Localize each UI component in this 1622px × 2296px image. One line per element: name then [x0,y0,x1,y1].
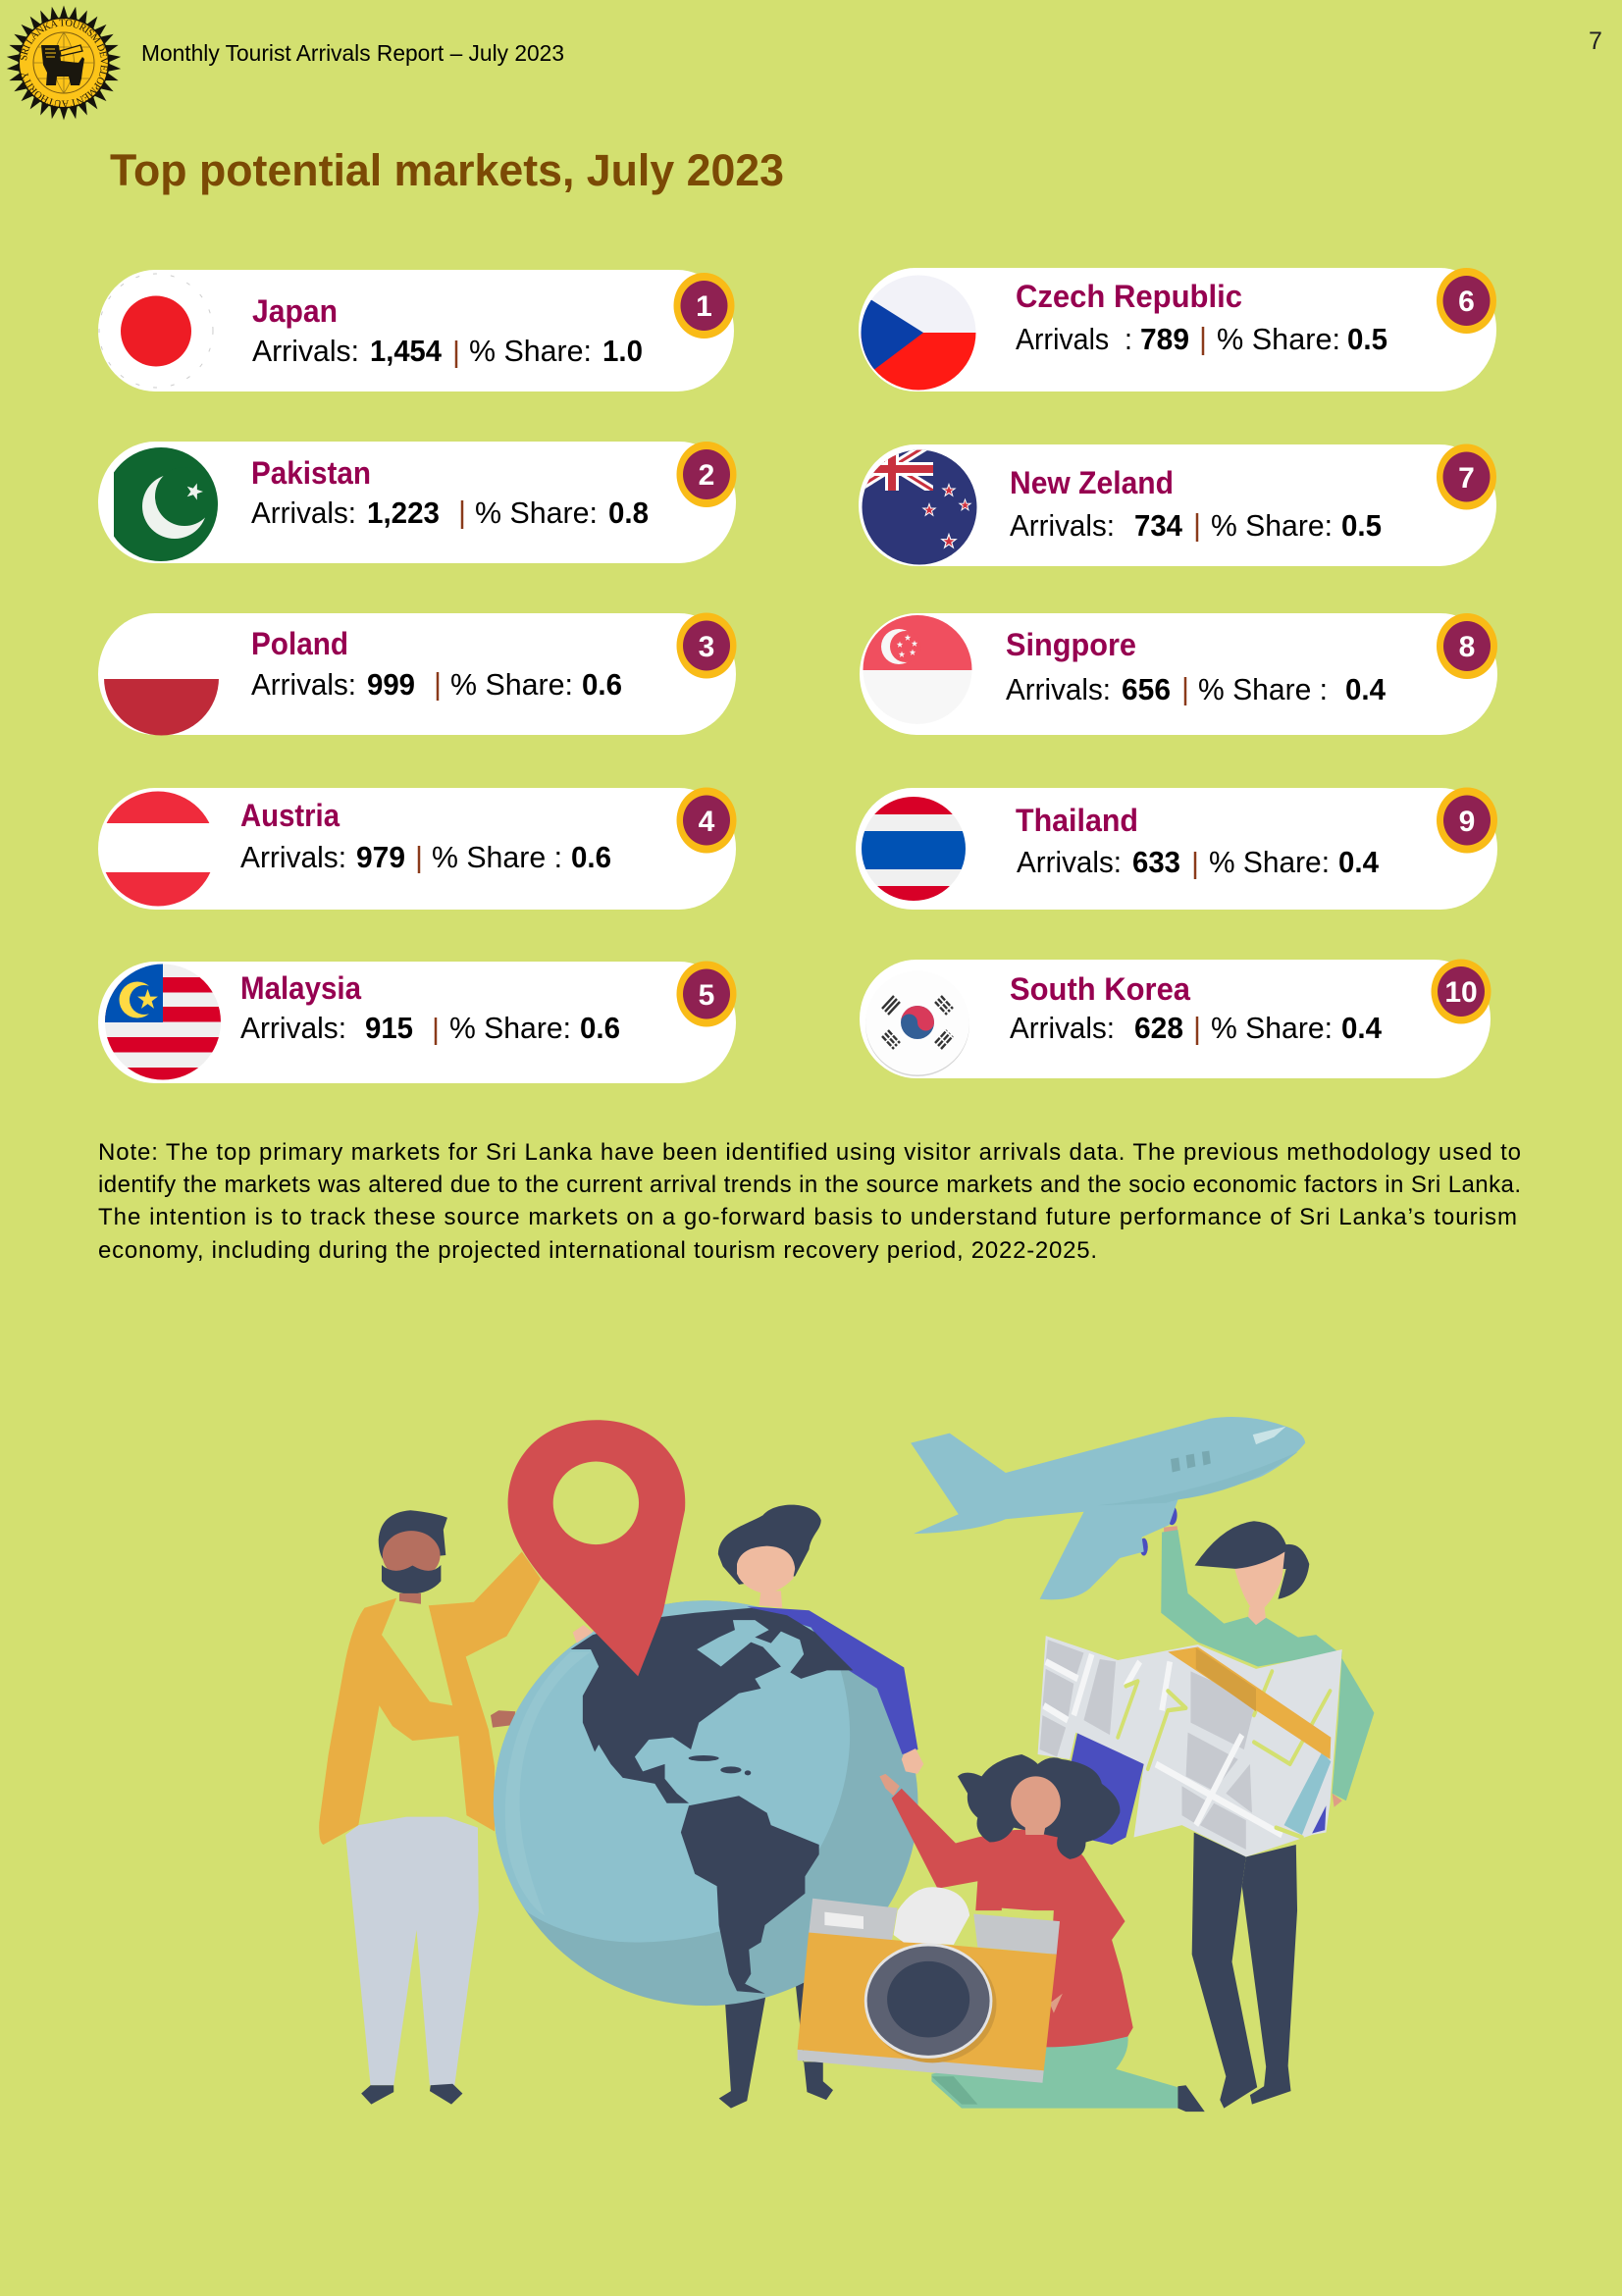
note text block: identify the markets was altered due to the current arrival trends in the source markets and the socio economic factors in Sri Lanka. [98,1172,1521,1198]
card [98,270,734,391]
arrivals and share: % Share: [475,496,598,530]
rank badge 9 [1437,787,1497,854]
country name: Austria [240,798,340,833]
rank badge 2: 2 [699,459,714,492]
title: Top potential markets, July 2023 [110,145,784,195]
panel: Czech Republic [844,268,1496,393]
icon: airplane [911,1417,1305,1599]
arrivals and share: 1.0 [602,334,643,368]
logo: Sri Lanka Tourism Development Authority seal: SRI LANKA TOURISM DEVELOPMENT AUTHORITY [20,20,108,107]
arrivals and share: % Share: [1211,508,1333,543]
panel: Poland [98,612,736,738]
card [860,960,1491,1078]
arrivals and share: Arrivals: [1017,845,1122,879]
rank badge 3 [677,612,736,679]
arrivals and share: 734 [1134,508,1183,543]
note text block: Note: The top primary markets for Sri Lanka have been identified using visitor arrivals data. The previous methodology used to [98,1139,1521,1166]
arrivals and share: Arrivals: [252,334,359,368]
rank badge 8 [1437,613,1497,679]
country name: Pakistan [251,455,371,491]
figure: woman holding map [1161,1521,1374,2109]
arrivals and share: 633 [1132,845,1180,879]
arrivals and share: 0.4 [1338,845,1380,879]
arrivals and share: Arrivals: [251,496,356,530]
globe landmasses [571,1608,853,1994]
arrivals and share: 1,223 [367,496,440,530]
note text block: The intention is to track these source markets on a go-forward basis to understand future performance of Sri Lanka’s tourism [98,1204,1517,1230]
panel: Thailand [856,787,1497,910]
rank badge 7 [1437,444,1496,510]
icon: folded city map [1038,1636,1342,1856]
illustration: plane, kneeling photographer and woman with map [798,1417,1374,2112]
arrivals and share [1016,322,1387,356]
arrivals and share: 0.6 [571,840,611,874]
rank badge 6: 6 [1458,286,1475,318]
header text: Monthly Tourist Arrivals Report – July 2023 [141,40,564,66]
note text block [98,1139,1521,1264]
country name: New Zeland [1010,465,1174,500]
flag: South Korea [865,971,969,1076]
country name: Malaysia [240,970,361,1006]
rank badge 10 [1431,960,1491,1024]
arrivals and share [252,334,643,368]
arrivals and share: 628 [1134,1011,1183,1045]
rank badge 4: 4 [699,806,715,838]
arrivals and share: % Share: [1217,322,1340,356]
arrivals and share: Arrivals: [1006,672,1111,706]
rank badge 5 [677,962,736,1026]
card [860,613,1497,735]
card [98,442,736,563]
country name: Czech Republic [1016,279,1242,314]
flag: New Zealand [862,449,977,565]
flag: Poland [104,679,219,736]
arrivals and share: 0.4 [1341,1011,1383,1045]
arrivals and share [240,1011,620,1045]
arrivals and share: 0.4 [1345,672,1387,706]
figure: standing man legs behind globe [719,1976,833,2109]
panel: Singapore [859,613,1497,735]
arrivals and share: Arrivals: [1010,1011,1115,1045]
panel: Japan [98,270,734,391]
panel: New Zealand [854,442,1496,574]
arrivals and share: 979 [356,840,405,874]
arrivals and share [1010,1011,1383,1045]
country name: Singpore [1006,627,1136,662]
arrivals and share: 1,454 [370,334,443,368]
rank badge 6 [1437,268,1496,334]
flag: Thailand [859,795,968,903]
arrivals and share: Arrivals : [1016,322,1132,356]
rank badge 7: 7 [1458,462,1475,495]
arrivals and share: 915 [365,1011,413,1045]
flag: Austria [106,791,210,907]
panel: Austria [98,785,736,912]
arrivals and share: % Share : [1198,672,1328,706]
arrivals and share: 999 [367,667,415,702]
rank badge 1 [673,273,734,339]
illustration: travellers around the globe [319,1420,923,2109]
card [859,268,1496,391]
card [98,613,736,735]
figure: man blue sleeve and head [573,1505,923,1774]
arrivals and share [1006,672,1387,706]
arrivals and share: 789 [1140,322,1189,356]
arrivals and share: % Share: [469,334,592,368]
arrivals and share: 656 [1122,672,1171,706]
page number: 7 [1589,27,1602,55]
rank badge 2 [677,442,736,507]
flag: Czech Republic [862,275,975,391]
figure: kneeling woman [879,1754,1205,2112]
arrivals and share [251,496,649,530]
country name: Thailand [1016,803,1138,838]
arrivals and share: % Share: [450,667,573,702]
card [859,444,1496,566]
arrivals and share: % Share: [449,1011,571,1045]
arrivals and share: 0.5 [1341,508,1382,543]
flag: Pakistan [114,447,218,561]
arrivals and share: Arrivals: [1010,508,1115,543]
country name: Japan [252,293,338,329]
rank badge 5: 5 [699,979,714,1012]
arrivals and share [240,840,611,874]
arrivals and share [251,667,622,702]
rank badge 4 [677,787,736,854]
rank badge 1: 1 [696,290,712,323]
card [98,788,736,910]
arrivals and share: Arrivals: [240,840,346,874]
logo: Sri Lanka Tourism Development Authority seal [6,6,122,120]
icon: camera [798,1887,1060,2083]
icon: location pin [508,1420,685,1676]
rank badge 3: 3 [699,631,714,663]
arrivals and share: % Share : [432,840,562,874]
panel: Pakistan [98,442,736,569]
flag: Japan [99,274,213,388]
arrivals and share: % Share: [1211,1011,1333,1045]
flag: Singapore [863,615,971,670]
panel: Malaysia [98,962,736,1084]
arrivals and share: % Share: [1209,845,1330,879]
country name: Poland [251,626,348,661]
arrivals and share: Arrivals: [251,667,356,702]
panel: South Korea [860,960,1491,1078]
card [98,962,736,1083]
rank badge 9: 9 [1459,806,1475,838]
globe [483,1569,918,2006]
flag: Malaysia [105,964,221,1079]
arrivals and share: 0.5 [1347,322,1387,356]
arrivals and share: 0.6 [580,1011,620,1045]
figure: man with beard holding pin [319,1510,541,2105]
arrivals and share [1017,845,1380,879]
card [856,788,1497,910]
arrivals and share: 0.8 [608,496,649,530]
arrivals and share [1010,508,1382,543]
rank badge 8: 8 [1459,631,1475,663]
country name: South Korea [1010,971,1190,1007]
note text block: economy, including during the projected international tourism recovery period, 2022-2025. [98,1237,1097,1264]
arrivals and share: Arrivals: [240,1011,346,1045]
arrivals and share: 0.6 [582,667,622,702]
rank badge 10: 10 [1444,976,1478,1009]
